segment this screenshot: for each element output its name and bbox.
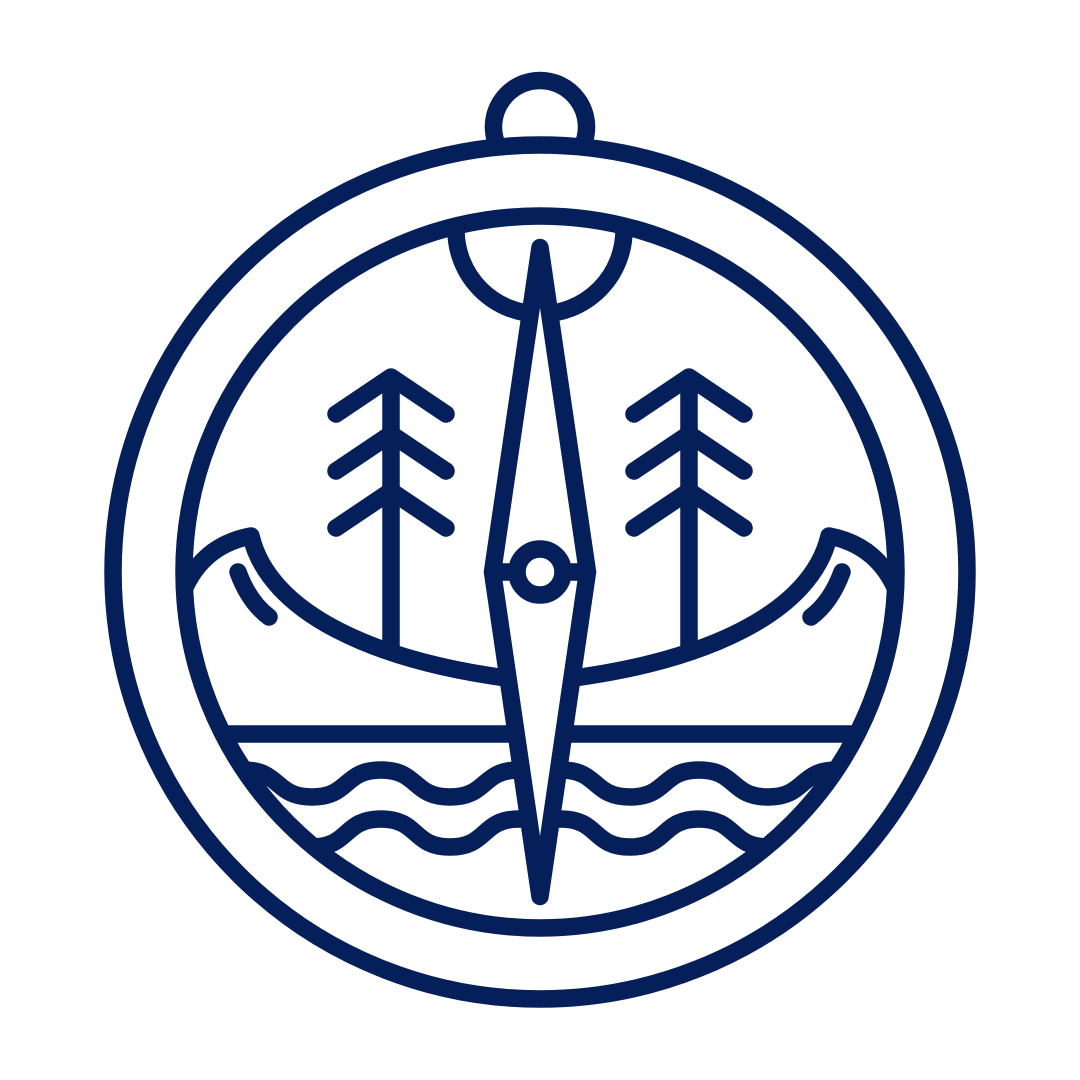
icon: sun [456,215,624,314]
needle pivot [517,549,563,595]
emblem: compass with canoe landscape [104,72,976,1008]
horizon line [190,725,890,743]
needle crossbar [492,563,588,581]
icon: compass loop [494,80,586,142]
scene inside the inner ring [180,215,900,847]
icon: compass needle [492,248,588,896]
icon: left pine tree [336,377,446,648]
icon: canoe [180,536,900,682]
inner compass ring [184,216,896,928]
outer compass ring [113,145,967,999]
icon: right pine tree [634,377,744,648]
waves: lower [312,819,768,847]
waves: upper [243,770,837,797]
